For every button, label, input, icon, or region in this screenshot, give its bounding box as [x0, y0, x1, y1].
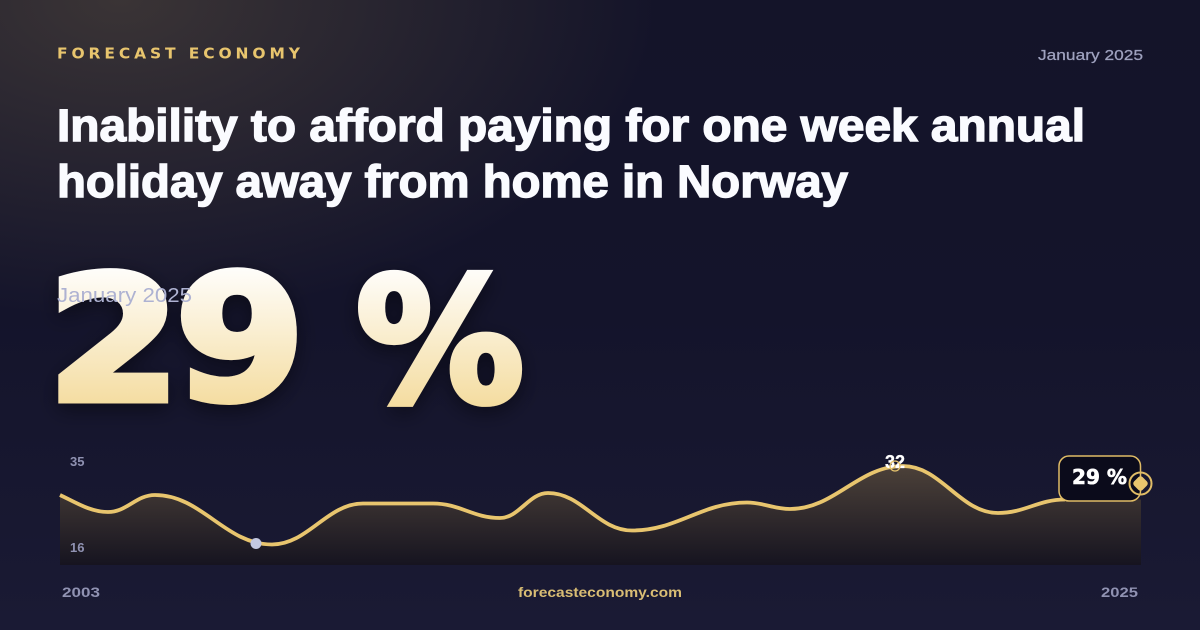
big value: % [356, 241, 524, 442]
axis label min: 16 [70, 540, 84, 555]
title: holiday away from home in Norway [57, 156, 848, 207]
value date overlay: January 2025 [57, 285, 192, 307]
big value: 2 [47, 239, 181, 441]
maximum label: 32 [885, 452, 905, 472]
current value marker [1130, 472, 1152, 494]
big value [47, 238, 524, 442]
source site: forecasteconomy.com [518, 584, 682, 600]
minimum marker [250, 538, 262, 549]
start year: 2003 [62, 584, 100, 600]
current value callout [1059, 456, 1140, 501]
current value callout: 29 % [1072, 465, 1127, 489]
line chart [60, 452, 1152, 565]
trend line [60, 466, 1065, 544]
maximum marker [890, 461, 900, 471]
title [57, 100, 1085, 207]
title: Inability to afford paying for one week annual [57, 100, 1085, 151]
header date: January 2025 [1038, 47, 1143, 64]
big value: 9 [175, 238, 305, 440]
end year: 2025 [1101, 584, 1138, 600]
brand label: FORECAST ECONOMY [57, 44, 301, 62]
area fill [60, 466, 1141, 565]
axis label max: 35 [70, 454, 84, 469]
